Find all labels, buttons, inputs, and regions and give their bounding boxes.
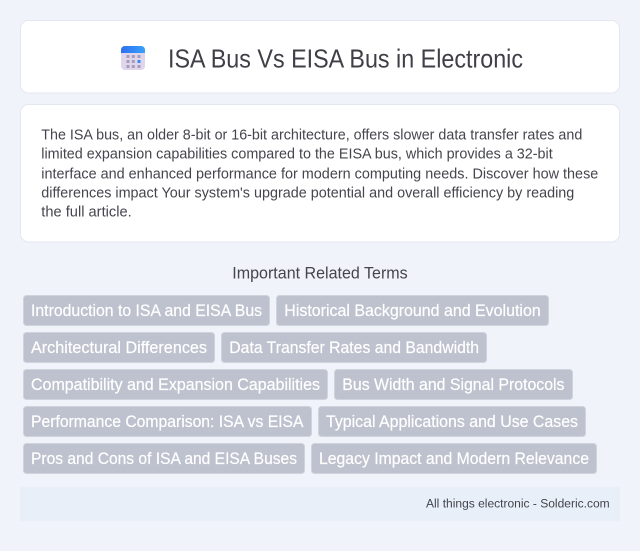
tag: bus width: [334, 370, 572, 400]
tag: history: Historical Background and Evolution: [284, 302, 541, 320]
tag: applications: [318, 406, 586, 436]
text block: summary paragraph: differences impact Your system's upgrade potential and overall efficiency by reading: [41, 185, 574, 201]
tag: architecture: [24, 332, 214, 362]
heading: important related terms: Important Related Terms: [232, 264, 408, 282]
panel: related term tags: [24, 296, 596, 474]
icon: calendar: [121, 46, 145, 70]
tag: performance: [24, 406, 312, 436]
text block: summary paragraph: the full article.: [41, 205, 132, 221]
text block: summary paragraph: interface and enhanced performance for modern computing needs. Discover how these: [41, 166, 598, 182]
text block: summary paragraph: The ISA bus, an older 8-bit or 16-bit architecture, offers slower data transfer rates and: [41, 127, 582, 143]
panel: summary text: [20, 104, 620, 242]
tag: history: [276, 296, 548, 326]
tag: legacy: Legacy Impact and Modern Relevance: [319, 450, 589, 468]
tag: legacy: [312, 444, 596, 474]
text block: summary paragraph: limited expansion capabilities compared to the EISA bus, which provides a 32-bit: [41, 147, 553, 163]
tag: introduction: [24, 296, 270, 326]
tag: introduction: Introduction to ISA and EISA Bus: [31, 302, 262, 320]
tag: applications: Typical Applications and Use Cases: [326, 413, 578, 431]
tag: architecture: Architectural Differences: [31, 339, 207, 357]
tag: data rates: Data Transfer Rates and Bandwidth: [229, 339, 479, 357]
title: ISA Bus Vs EISA Bus in Electronic: [168, 46, 523, 74]
panel: title header: [20, 20, 620, 93]
tag: performance: Performance Comparison: ISA vs EISA: [31, 413, 304, 431]
tag: pros and cons: [24, 444, 304, 474]
footer bar: [20, 487, 620, 521]
text block: summary paragraph: [41, 127, 598, 221]
tag: bus width: Bus Width and Signal Protocols: [342, 376, 564, 394]
tag: pros and cons: Pros and Cons of ISA and EISA Buses: [31, 450, 297, 468]
tag: data rates: [222, 332, 486, 362]
tag: compatibility: Compatibility and Expansion Capabilities: [31, 376, 320, 394]
footer credit: All things electronic - Solderic.com: [426, 497, 610, 511]
tag: compatibility: [24, 370, 328, 400]
